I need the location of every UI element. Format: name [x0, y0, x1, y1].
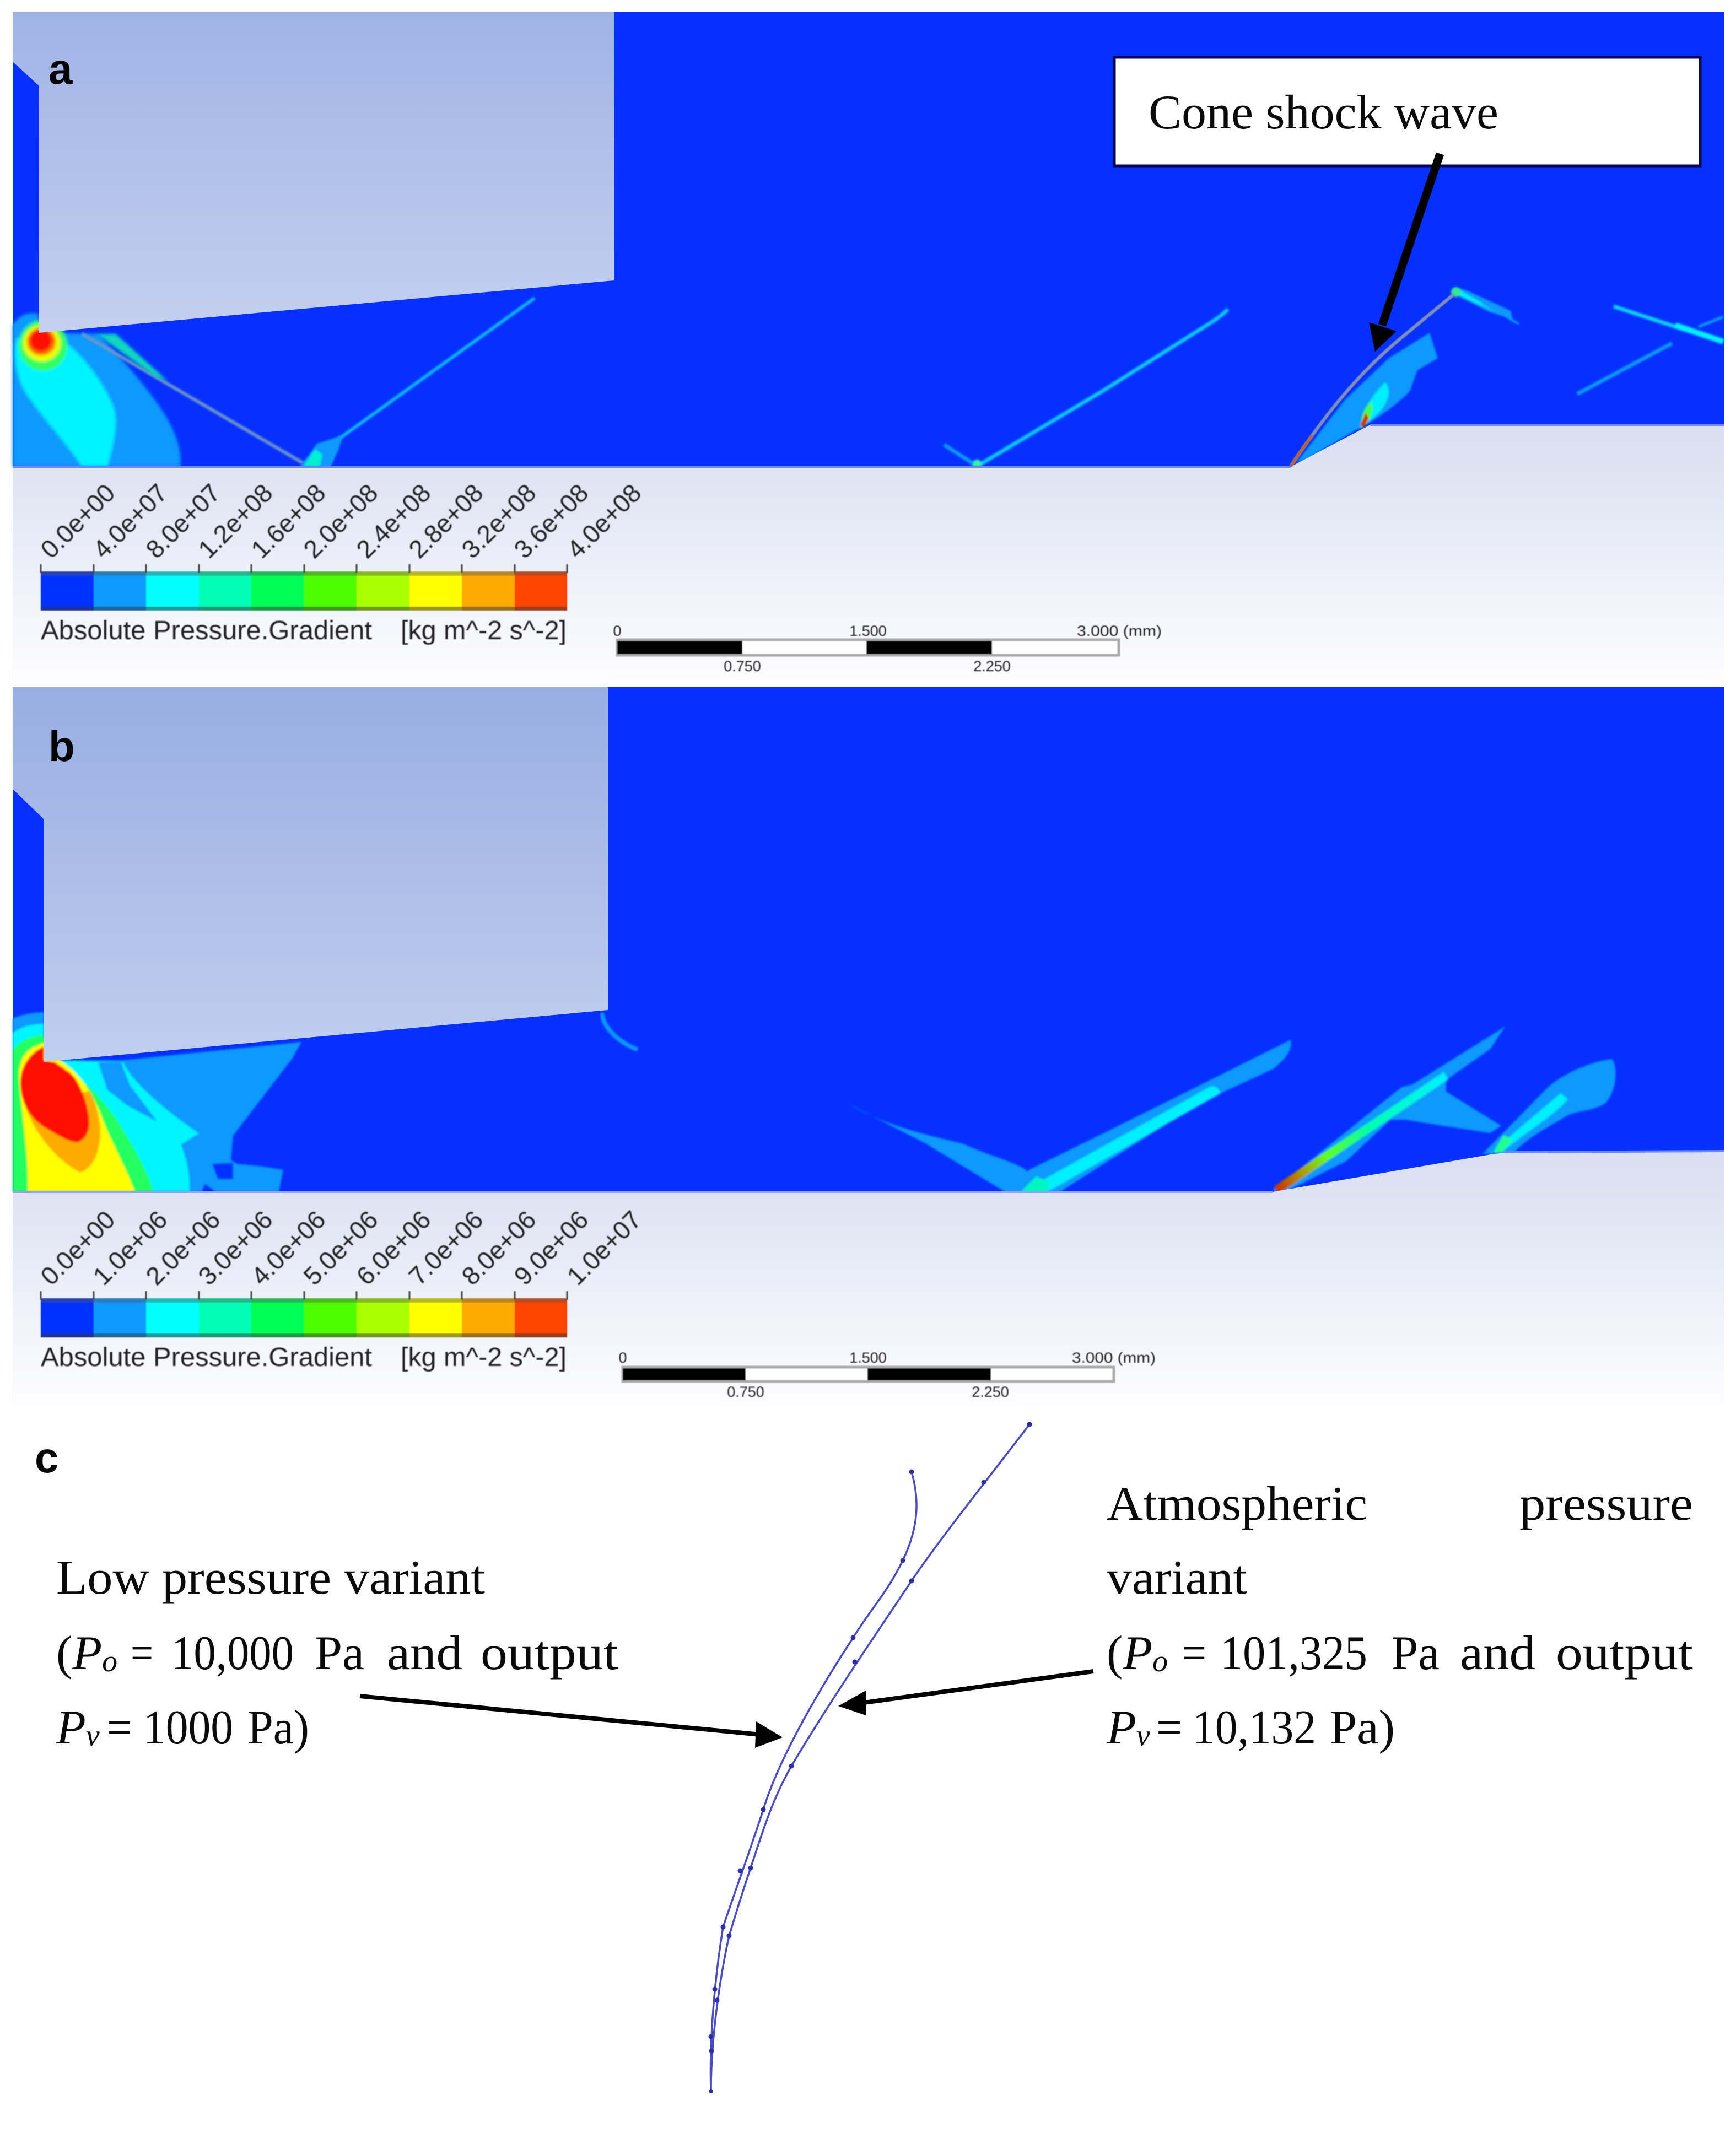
contours near nozzle lip a [13, 313, 181, 467]
curve: atmospheric pressure variant [711, 1424, 1029, 2091]
text block: low pressure variant: and [387, 1627, 462, 1680]
panel a: low-gradient contour simulation [13, 12, 1724, 683]
scale bar a: 0 [613, 623, 622, 639]
legend tick labels a: 2.8e+08 [403, 478, 489, 564]
legend tick labels a [35, 478, 647, 564]
text block: low pressure variant: output [481, 1627, 618, 1680]
flow field background b [13, 687, 1724, 1194]
text block: atmospheric pressure variant: = [1156, 1701, 1182, 1754]
scale bar b [618, 1349, 1156, 1400]
text block: atmospheric pressure variant: and [1460, 1627, 1535, 1680]
second ramp shock blob b [1482, 1059, 1616, 1154]
lower wall with ramp b [13, 1151, 1724, 1406]
text block: atmospheric pressure variant: pressure [1519, 1477, 1693, 1531]
cone shock line a [1291, 294, 1454, 466]
text block: low pressure variant: 1000 [143, 1701, 233, 1754]
scale bar b: 3.000 (mm) [1072, 1349, 1156, 1366]
legend tick labels b: 1.0e+06 [87, 1205, 173, 1291]
panel letter a: a [48, 45, 73, 93]
legend tick labels b: 7.0e+06 [403, 1205, 489, 1291]
legend title a [41, 616, 567, 645]
legend tick labels b: 2.0e+06 [140, 1205, 226, 1291]
scale bar a: 3.000 (mm) [1077, 623, 1162, 639]
text block: atmospheric pressure variant: 101,325 [1220, 1627, 1367, 1680]
scale bar a: 1.500 [849, 623, 887, 639]
text block: atmospheric pressure variant: = [1182, 1627, 1206, 1680]
legend title b: [kg m^-2 s^-2] [401, 1343, 567, 1372]
upper nozzle block b [13, 687, 608, 1062]
text block: atmospheric pressure variant: v [1136, 1719, 1150, 1753]
legend tick labels b: 3.0e+06 [192, 1205, 278, 1291]
text block: low pressure variant: Pa) [247, 1701, 309, 1754]
colour scale bar a [41, 564, 567, 611]
text block: low pressure variant: v [86, 1719, 100, 1753]
text block: low pressure variant: 10,000 [171, 1627, 294, 1680]
callout: cone shock wave [1114, 57, 1700, 166]
text block: low pressure variant [56, 1551, 618, 1754]
text block: atmospheric pressure variant: P [1106, 1701, 1136, 1754]
flow field background a [13, 12, 1724, 469]
legend tick labels b: 8.0e+06 [456, 1205, 542, 1291]
text block: atmospheric pressure variant: o [1152, 1644, 1168, 1678]
downstream reflected shock a [944, 309, 1228, 468]
legend title a: Absolute Pressure.Gradient [41, 616, 372, 645]
legend tick labels b: 1.0e+07 [561, 1205, 647, 1291]
text block: low pressure variant: P [56, 1701, 86, 1754]
text block: atmospheric pressure variant: Pa [1392, 1627, 1440, 1680]
contours near nozzle lip b [13, 1012, 301, 1192]
legend tick labels b: 0.0e+00 [35, 1205, 121, 1291]
colour legend a [35, 478, 647, 645]
legend tick labels b: 5.0e+06 [298, 1205, 384, 1291]
panel letter c: c [35, 1433, 58, 1482]
text block: low pressure variant: Pa [315, 1627, 364, 1680]
legend tick labels b [35, 1205, 647, 1291]
curve: low pressure variant [710, 1472, 916, 2091]
legend title b [41, 1343, 567, 1372]
text block: low pressure variant: Low pressure variant [56, 1551, 485, 1605]
text block: atmospheric pressure variant: Atmospheric [1107, 1477, 1367, 1531]
legend tick labels a: 4.0e+07 [87, 478, 173, 564]
reflection foot patch a [300, 435, 343, 467]
scale bar b: 1.500 [849, 1349, 887, 1366]
far-right shock lines a [1577, 306, 1723, 394]
text block: atmospheric pressure variant [1106, 1477, 1693, 1754]
scale bar a [613, 623, 1162, 674]
legend tick labels b: 4.0e+06 [245, 1205, 331, 1291]
colour scale bar b [41, 1291, 567, 1337]
trailing-edge curl b [602, 1013, 638, 1050]
scale bar b: 2.250 [972, 1384, 1009, 1400]
text block: low pressure variant: = [107, 1701, 132, 1754]
text block: low pressure variant: (P [56, 1627, 102, 1680]
legend title b: Absolute Pressure.Gradient [41, 1343, 372, 1372]
legend tick labels a: 0.0e+00 [35, 478, 121, 564]
text block: atmospheric pressure variant: output [1556, 1627, 1693, 1680]
text block: atmospheric pressure variant: Pa) [1330, 1701, 1395, 1754]
legend tick labels b: 9.0e+06 [508, 1205, 594, 1291]
legend tick labels a: 2.0e+08 [298, 478, 384, 564]
panel c: nozzle profile comparison [35, 1422, 1693, 2093]
lower wall with ramp a [13, 425, 1724, 683]
reflected shock line a [305, 298, 535, 463]
scale bar b: 0.750 [727, 1384, 764, 1400]
scale bar a: 2.250 [973, 658, 1011, 674]
text block: low pressure variant: o [102, 1644, 117, 1678]
arrow: callout to cone shock [1369, 154, 1440, 352]
panel b: high-gradient contour simulation [13, 687, 1724, 1406]
upper nozzle block a [13, 12, 614, 333]
incident shock line a [82, 334, 304, 463]
arrow: low pressure variant [360, 1696, 783, 1748]
V-shaped reflected shock b [848, 1040, 1291, 1193]
scale bar b: 0 [618, 1349, 627, 1366]
colour legend b [35, 1205, 647, 1372]
legend tick labels a: 3.2e+08 [456, 478, 542, 564]
legend tick labels a: 2.4e+08 [351, 478, 436, 564]
curve control points [709, 1422, 1032, 2093]
legend tick labels a: 1.6e+08 [245, 478, 331, 564]
legend tick labels a: 4.0e+08 [561, 478, 647, 564]
arrow: atmospheric pressure variant [838, 1671, 1093, 1715]
text block: atmospheric pressure variant: variant [1107, 1551, 1247, 1605]
legend tick labels a: 1.2e+08 [192, 478, 278, 564]
panel letter b: b [48, 722, 75, 770]
text block: atmospheric pressure variant: (P [1107, 1627, 1152, 1680]
ramp shock H-shape b [1273, 1027, 1505, 1191]
legend tick labels a: 3.6e+08 [508, 478, 594, 564]
legend tick labels b: 6.0e+06 [351, 1205, 436, 1291]
legend tick labels a: 8.0e+07 [140, 478, 226, 564]
scale bar a: 0.750 [724, 658, 761, 674]
text block: low pressure variant: = [131, 1627, 153, 1680]
cone shock and wake contours a [1296, 287, 1519, 463]
nozzle profile curves [709, 1422, 1032, 2093]
text block: atmospheric pressure variant: 10,132 [1193, 1701, 1316, 1754]
legend title a: [kg m^-2 s^-2] [401, 616, 567, 645]
callout: cone shock wave: Cone shock wave [1149, 86, 1498, 139]
